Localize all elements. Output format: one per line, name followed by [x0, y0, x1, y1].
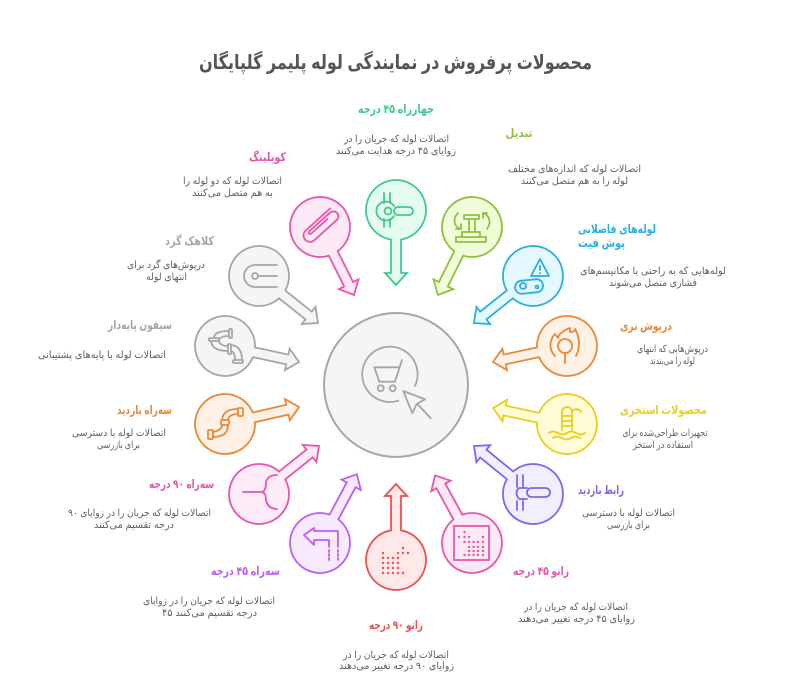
heading: محصولات استخری	[620, 403, 707, 418]
description: استفاده در استخر	[632, 440, 693, 451]
heading: سیفون پایه‌دار	[107, 318, 172, 333]
description	[143, 596, 275, 619]
panel: lime reducer	[411, 126, 641, 308]
description: لوله را می‌بندند	[650, 356, 695, 367]
panel: green 45 cross	[336, 102, 456, 285]
description: اتصالات لوله با دسترسی	[582, 508, 675, 519]
petal with arrow	[487, 310, 603, 391]
petal with arrow	[189, 310, 305, 391]
panel: red elbow 90	[339, 484, 454, 672]
heading: رابط بازدید	[578, 483, 624, 497]
panel: violet tee 45	[143, 460, 383, 619]
description	[72, 428, 166, 451]
icon: dotted square	[454, 526, 489, 560]
petal with arrow	[455, 234, 575, 346]
description: درپوش‌های گرد برای	[127, 259, 205, 271]
description	[580, 266, 726, 289]
petal with arrow	[217, 234, 337, 346]
description	[336, 134, 456, 157]
description	[68, 508, 211, 531]
heading: زانو ۹۰ درجه	[369, 618, 423, 633]
heading: زانو ۴۵ درجه	[513, 564, 569, 579]
icon: siphon pipes	[209, 329, 243, 363]
heading: کلاهک گرد	[165, 234, 214, 248]
description: برای بازرسی	[607, 520, 650, 531]
panel: gray round cap	[127, 234, 337, 346]
description	[183, 176, 282, 199]
petal with arrow	[455, 423, 575, 536]
description: برای بازرسی	[97, 440, 140, 451]
petal with arrow	[409, 461, 513, 584]
petal with arrow	[366, 484, 426, 590]
panel: blue push fit	[455, 222, 726, 346]
description: زوایای ۴۵ درجه هدایت می‌کنند	[336, 146, 456, 157]
panel: central hub	[324, 313, 468, 457]
heading: تبدیل	[506, 126, 532, 140]
icon: dot grid	[382, 547, 409, 574]
petal with arrow	[366, 180, 426, 285]
description: درجه تقسیم می‌کنند ۴۵	[162, 608, 257, 619]
panel: gray siphon	[38, 310, 305, 391]
description	[582, 508, 675, 531]
icon: s pipe	[208, 408, 243, 439]
icon: paper clip	[301, 207, 340, 245]
description: اتصالات لوله که جریان را در	[523, 602, 628, 613]
description	[127, 259, 205, 283]
description: زوایای ۹۰ درجه تغییر می‌دهند	[339, 661, 454, 672]
heading: کوپلینگ	[249, 150, 286, 165]
description: اتصالات لوله که جریان را در زوایای ۹۰	[68, 508, 211, 519]
description	[508, 164, 641, 187]
description: تجهیزات طراحی‌شده برای	[622, 428, 708, 439]
panel: yellow pool	[487, 379, 708, 460]
icon: flame and bulb	[550, 328, 579, 363]
description: به هم متصل می‌کنند	[192, 188, 273, 199]
icon: fork	[243, 475, 277, 509]
center circle	[324, 313, 468, 457]
description: درپوش‌هایی که انتهای	[637, 344, 708, 355]
panel: pink tee 90	[68, 423, 338, 536]
icon: service fitting	[516, 475, 550, 510]
icon: round cap	[244, 265, 277, 287]
heading: سه‌راه ۹۰ درجه	[149, 477, 214, 491]
panel: purple service coupling	[455, 423, 675, 536]
panel: pink coupling	[183, 150, 381, 308]
petal with arrow	[280, 187, 381, 308]
heading: چهارراه ۴۵ درجه	[358, 102, 434, 116]
icon: warning and link	[514, 259, 549, 294]
description: اتصالات لوله که جریان را در	[342, 650, 449, 661]
description: لوله را به هم متصل می‌کنند	[521, 176, 628, 187]
petal with arrow	[279, 460, 383, 584]
description: زوایای ۴۵ درجه تغییر می‌دهند	[518, 614, 635, 625]
description: اتصالات لوله که جریان را در زوایای	[143, 596, 275, 607]
icon: turn arrow	[304, 528, 338, 560]
description: انتهای لوله	[146, 272, 187, 283]
description: لوله‌هایی که به راحتی با مکانیسم‌های	[580, 266, 726, 277]
description: درجه تقسیم می‌کنند	[94, 520, 174, 531]
heading	[578, 222, 656, 251]
description: اتصالات لوله که جریان را در	[343, 134, 449, 145]
petal with arrow	[217, 423, 338, 536]
description: اتصالات لوله که اندازه‌های مختلف	[508, 164, 641, 175]
icon: reducer	[454, 213, 490, 242]
petal with arrow	[411, 187, 512, 308]
heading: لوله‌های فاضلابی	[578, 222, 656, 237]
title: محصولات پرفروش در نمایندگی لوله پلیمر گلپایگان	[199, 50, 592, 75]
petal with arrow	[189, 378, 306, 460]
description	[637, 344, 708, 367]
petal with arrow	[487, 379, 603, 460]
icon: cross fitting	[376, 193, 413, 227]
description: اتصالات لوله با پایه‌های پشتیبانی	[38, 350, 166, 361]
heading: درپوش نری	[620, 319, 672, 334]
panel: pink elbow 45	[409, 461, 635, 625]
heading: سه‌راه ۴۵ درجه	[211, 564, 280, 578]
icon: shopping cart with cursor	[362, 347, 431, 418]
description	[339, 650, 454, 672]
panel: orange cap	[487, 310, 708, 391]
heading: سه‌راه بازدید	[117, 403, 172, 417]
description	[622, 428, 708, 451]
panel: orange service tee	[72, 378, 306, 460]
description: اتصالات لوله که دو لوله را	[183, 176, 282, 187]
description: فشاری متصل می‌شوند	[609, 278, 697, 289]
icon: pool ladder	[549, 407, 585, 440]
heading: پوش فیت	[578, 236, 625, 251]
description	[518, 602, 635, 625]
description: اتصالات لوله با دسترسی	[72, 428, 166, 439]
